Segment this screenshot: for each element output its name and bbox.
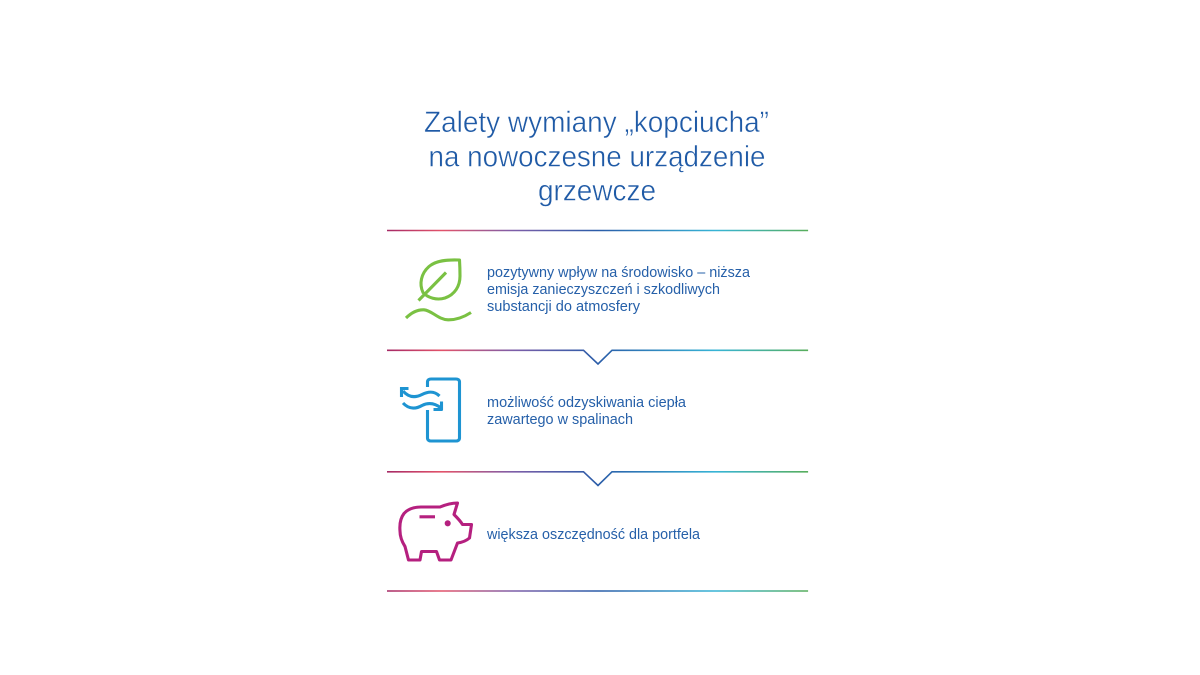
panel: heat recovery benefit xyxy=(402,379,687,441)
divider with arrow 2 xyxy=(387,472,808,486)
icon: heat recovery exchanger xyxy=(402,379,460,441)
text: heat recovery benefit: możliwość odzyskiwania ciepła xyxy=(487,395,687,411)
top divider xyxy=(387,230,808,232)
title xyxy=(424,106,769,208)
icon: piggy bank xyxy=(400,503,472,560)
title: Zalety wymiany „kopciucha” xyxy=(424,106,769,139)
title: grzewcze xyxy=(538,174,656,208)
text: environment benefit: substancji do atmosfery xyxy=(487,299,641,315)
bottom divider xyxy=(387,590,808,592)
text: environment benefit xyxy=(487,265,751,315)
title: na nowoczesne urządzenie xyxy=(428,140,766,174)
panel: savings benefit xyxy=(400,503,701,560)
text: environment benefit: emisja zanieczyszczeń i szkodliwych xyxy=(487,282,720,298)
text: environment benefit: pozytywny wpływ na środowisko – niższa xyxy=(487,265,751,281)
divider with arrow 1 xyxy=(387,350,808,364)
text: heat recovery benefit: zawartego w spalinach xyxy=(487,412,633,428)
icon: leaf over wave xyxy=(406,260,471,320)
text: savings benefit: większa oszczędność dla portfela xyxy=(486,527,701,543)
text: heat recovery benefit xyxy=(487,395,687,428)
panel: environment benefit xyxy=(406,260,751,320)
